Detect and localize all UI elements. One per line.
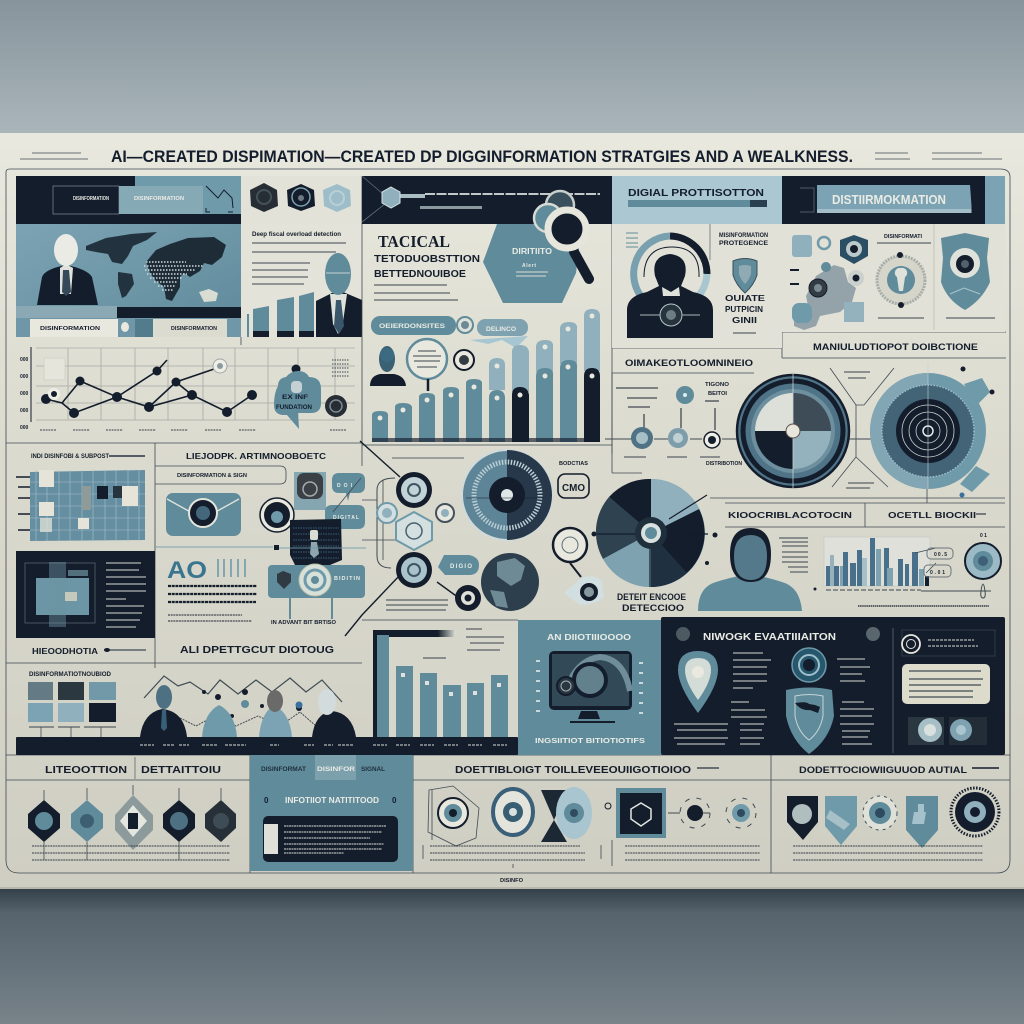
panel: bottom middle icons [423, 764, 760, 868]
panel: bottom right icons: DODETTOCIOWIIGUUOD AUTIAL [799, 765, 967, 776]
icon: envelope [166, 493, 241, 536]
callout bubble: EX INF [282, 395, 308, 401]
badge bar: IN ADVANT BIT BRTISO [271, 620, 337, 626]
icon: badge [941, 233, 990, 310]
node flow [605, 382, 962, 457]
icon: seal [877, 252, 925, 308]
icon: monitor [538, 651, 641, 722]
heading: bottom left [32, 645, 334, 656]
panel: digital protection: GINII [732, 315, 757, 325]
line chart panel: 000 [20, 374, 29, 380]
line chart panel [20, 347, 355, 431]
panel: teal info block: 0 [264, 796, 269, 805]
hexagon with magnifier [483, 191, 589, 303]
teal panel: AI monitoring [518, 620, 661, 755]
panel: hexagon icons [241, 176, 362, 224]
dark panel: network evaluation: NIWOGK EVAATIIIAITON [703, 631, 836, 643]
pie radar chart: DISTRIBOTION [706, 461, 742, 467]
panel: teal info block: DISINFORMAT [261, 767, 306, 773]
panel: world map presenter: DISINFORMATION [171, 326, 217, 332]
dark inset panel [16, 551, 155, 638]
icon: node map [790, 235, 868, 330]
world map [86, 232, 226, 302]
panel: text and bars with person [241, 224, 362, 337]
heading: bottom left: HIEOODHOTIA [32, 646, 98, 656]
text block: AO: AO [167, 557, 207, 584]
line chart panel: 000 [20, 425, 29, 431]
line chart panel: 000 [20, 391, 29, 397]
panel: digital protection: MISINFORMATION [719, 232, 768, 239]
panel: bottom left icons: DETTAITTOIU [141, 765, 221, 776]
panel: world map presenter: DISINFORMATION [40, 326, 100, 332]
pills and small icons [370, 316, 528, 391]
text block: AO [167, 557, 257, 621]
node flow: BEITOI [708, 391, 727, 397]
thumbnail grid: DISINFORMATIOTNOUBIOD [29, 671, 111, 678]
envelope box [155, 466, 286, 536]
panel: digital protection: DIGIAL PROTTISOTTON [628, 187, 764, 199]
icon: presenter in suit [37, 234, 98, 305]
panel: world map presenter [16, 176, 241, 337]
panel: chart with frame [373, 629, 518, 737]
heading: tactical: TACICAL [378, 232, 450, 251]
panel: world map presenter: DISINFORMATION [73, 196, 109, 202]
hexagon with magnifier: DIRITIITO [512, 247, 552, 256]
callout bubble [274, 371, 321, 429]
panel: text and bars with person: Deep fiscal overload detection [252, 231, 341, 238]
heading: character: OIMAKEOTLOOMNINEIO [625, 358, 753, 369]
icon: man in suit [316, 253, 362, 337]
line chart panel: 000 [20, 408, 29, 414]
network icons centre: DIGITAL [333, 515, 359, 521]
globe icons and radar: CMO [562, 483, 585, 494]
heading: manipulation detection: MANIULUDTIOPOT DOIBCTIONE [813, 342, 978, 353]
globe icons and radar [462, 450, 589, 611]
icons and label below pie: DETECCIOO [622, 603, 684, 613]
dark footer band [16, 737, 518, 755]
heading: middle left: LIEJODPK. ARTIMNOOBOETC [186, 451, 326, 461]
panel: teal info block: 0 [392, 796, 397, 805]
thumbnail grid [28, 671, 116, 739]
bar chart: distribution: 0 1 [980, 533, 987, 539]
dark panel: network evaluation [661, 617, 1005, 755]
teal panel: AI monitoring: INGSIITIOT BITIOTIOTIFS [535, 736, 645, 745]
legend top right [902, 630, 995, 656]
panel: digital protection: OUIATE [725, 293, 765, 303]
footer label: DISINFO [500, 878, 523, 884]
panel: bottom left icons [28, 757, 236, 860]
heading: tactical: TETODUOBSTTION [374, 253, 480, 265]
grid map image [16, 470, 145, 541]
pills and small icons: DELINCO [486, 327, 516, 333]
icon: shield [733, 258, 757, 293]
line chart panel: 000 [20, 357, 29, 363]
bar chart: distribution: 00.5 [934, 552, 947, 558]
globe icons and radar: BODCTIAS [559, 461, 589, 467]
heading: left middle: INDI DISINFOBI & SUBPOST [31, 453, 109, 460]
headings: right middle: OCETLL BIOCKII [888, 510, 976, 520]
teal panel: AI monitoring: AN DIIOTIIIOOOO [547, 633, 631, 642]
badge bar: BIDITIN [334, 576, 360, 582]
callout bubble: FUNDATION [276, 405, 312, 411]
icon: scan ring [792, 648, 826, 682]
panel: bottom middle icons: DOETTIBLOIGT TOILLEVEEOUIIGOTIOIOO [455, 764, 691, 776]
icon: map pin [678, 651, 718, 713]
icon row [28, 785, 236, 860]
bar chart: distribution [779, 533, 1001, 606]
bar chart: distribution: 0.01 [930, 570, 945, 576]
pie radar chart [592, 461, 742, 587]
icons and label below pie [553, 528, 686, 613]
chart: right radar dial [612, 362, 1005, 503]
panel: world map presenter: DISINFORMATION [134, 196, 184, 202]
heading: tactical: BETTEDNOUIBOE [374, 268, 466, 280]
panel: disinformation [782, 176, 1005, 332]
node network: DIGIO [450, 564, 472, 570]
headings: right middle: KIOOCRIBLACOTOCIN [728, 510, 852, 520]
panel: digital protection: PROTEGENCE [719, 240, 769, 247]
heading: character [612, 358, 754, 473]
title: AI—CREATED DISPIMATION—CREATED DP DIGGINFORMATION STRATGIES AND A WEALKNESS. [111, 148, 853, 166]
chart: left segmented dial [737, 368, 894, 490]
network icons centre [155, 472, 366, 626]
board edge shadow [0, 887, 1024, 889]
network icons centre: DOI [337, 483, 353, 489]
icon: shield [786, 688, 834, 754]
node flow: TIGONO [705, 382, 730, 388]
panel rules [6, 176, 1010, 873]
panel: teal info block: INFOTIIOT NATITITOOD [285, 796, 379, 805]
heading: bottom left: ALI DPETTGCUT DIOTOUG [180, 645, 334, 656]
panel: digital protection: PUTPICIN [725, 304, 763, 314]
hexagon with magnifier: Alert [522, 263, 536, 269]
panel: bottom right icons [787, 765, 999, 860]
panel: bottom left icons: LITEOOTTION [45, 765, 127, 776]
badge bar [268, 564, 365, 626]
headings: right middle [728, 510, 986, 520]
icon: user silhouette [698, 528, 802, 611]
bar chart: tactical [372, 309, 600, 442]
panel: teal info block: SIGNAL [361, 767, 385, 773]
connector lines [333, 441, 459, 636]
panel: tactical header band [362, 176, 612, 224]
node network [377, 458, 481, 611]
envelope box: DISINFORMATION & SIGN [177, 473, 247, 479]
icon row [787, 788, 999, 848]
header rules [6, 153, 1010, 873]
thumbnail icons [908, 717, 987, 745]
main poster board [0, 133, 1024, 888]
icon: protected person [627, 236, 713, 338]
panel: disinformation: DISINFORMATI [884, 234, 922, 240]
pills and small icons: OEIERDONSITES [379, 324, 445, 330]
people network [140, 676, 356, 737]
note card [902, 664, 990, 704]
heading: tactical [374, 232, 480, 300]
panel: teal info block [250, 755, 413, 871]
panel: teal info block: DISINFOR [317, 767, 356, 773]
panel: disinformation: DISTIIRMOKMATION [832, 193, 946, 207]
panel: digital protection [612, 176, 782, 348]
icon row [428, 786, 756, 846]
icons and label below pie: DETEIT ENCOOE [617, 592, 686, 602]
